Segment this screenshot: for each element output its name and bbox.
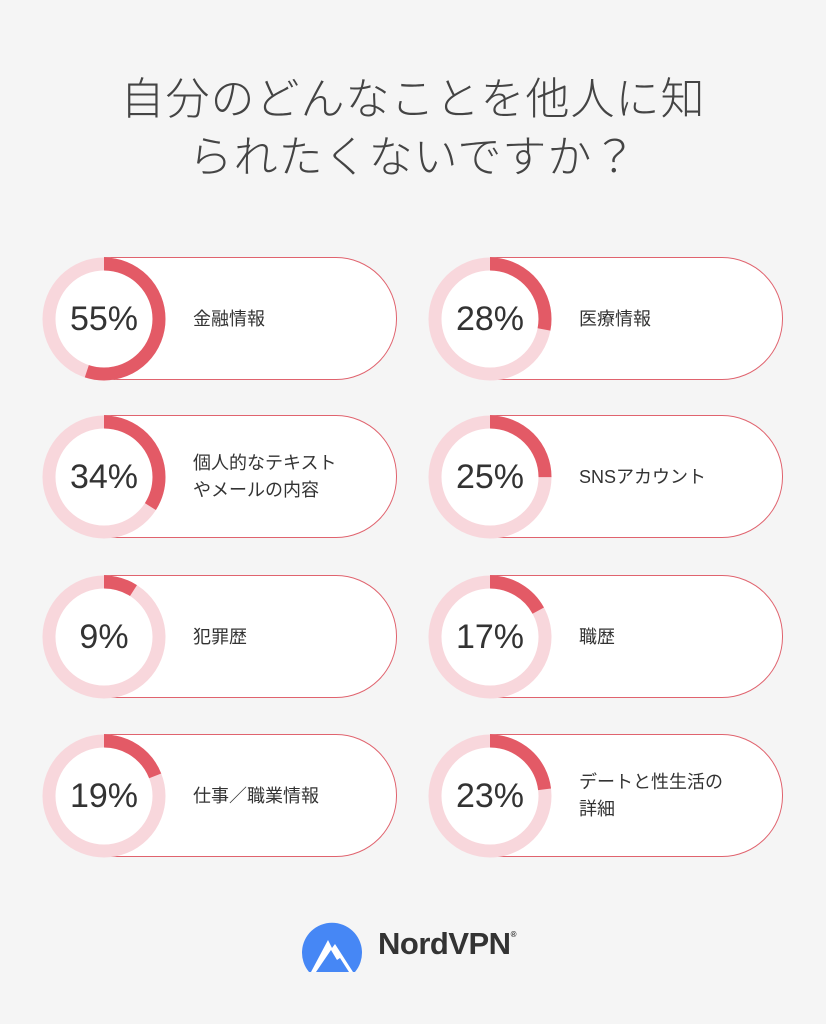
title: られたくないですか？ — [189, 133, 637, 182]
card: 23% dating: デートと性生活の — [579, 772, 723, 792]
card: 25% SNS: SNSアカウント — [579, 466, 706, 486]
card: 17% career — [428, 575, 783, 698]
title: 自分のどんなことを他人に知 — [120, 75, 706, 124]
card: 19% work: 仕事／職業情報 — [193, 786, 319, 806]
card: 28% medical: 28% — [456, 300, 524, 338]
card: 19% work: 19% — [70, 777, 138, 815]
card: 25% SNS — [428, 415, 783, 538]
card: 9% criminal — [42, 575, 397, 698]
card: 23% dating: 23% — [456, 777, 524, 815]
card: 34% texts: 34% — [70, 458, 138, 496]
card: 17% career: 職歴 — [579, 626, 615, 646]
card: 34% texts — [42, 415, 397, 538]
card: 55% financial — [42, 257, 397, 380]
card: 23% dating: 詳細 — [579, 799, 615, 819]
card: 34% texts: 個人的なテキスト — [193, 453, 336, 473]
card: 34% texts: やメールの内容 — [193, 480, 319, 500]
card: 55% financial: 金融情報 — [193, 308, 265, 328]
logo: NordVPN — [302, 922, 516, 972]
card: 19% work — [42, 734, 397, 858]
logo text: NordVPN® — [378, 926, 516, 961]
card: 9% criminal: 犯罪歴 — [193, 626, 247, 646]
icon: nordvpn mountain — [302, 922, 362, 972]
title — [120, 75, 706, 182]
card: 17% career: 17% — [456, 618, 524, 656]
card: 28% medical — [428, 257, 783, 380]
card: 9% criminal: 9% — [79, 618, 129, 656]
card: 23% dating — [428, 734, 783, 858]
card: 55% financial: 55% — [70, 300, 138, 338]
card: 25% SNS: 25% — [456, 458, 524, 496]
card: 28% medical: 医療情報 — [579, 308, 651, 328]
